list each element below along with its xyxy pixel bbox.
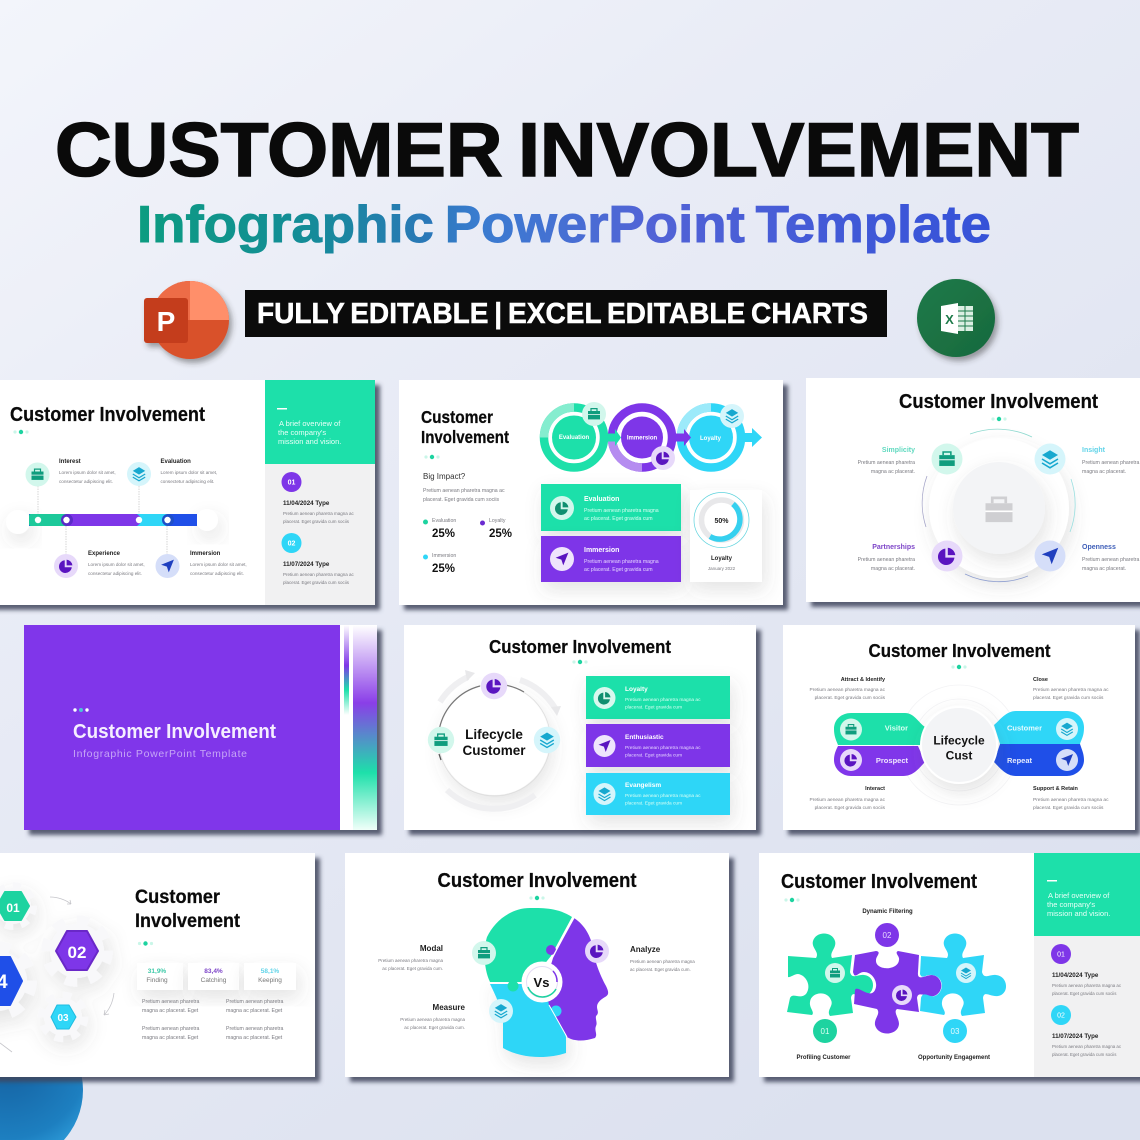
heading: customer: Customer <box>421 407 493 427</box>
labels: Openness <box>1082 544 1116 551</box>
timeline labels: Lorem ipsum dolor sit amet, <box>160 470 217 475</box>
paragraphs: magna ac placerat. Eget <box>142 1035 199 1041</box>
labels: Modal <box>420 944 443 953</box>
timeline bar <box>6 486 218 554</box>
card: evaluation: Pretium aenean pharetra magna <box>584 508 659 514</box>
big impact block <box>423 472 512 575</box>
circle flow <box>544 402 762 470</box>
side panel text: Pretium aenean pharetra magna ac <box>1052 983 1122 988</box>
center circle: Lifecycle <box>933 734 985 748</box>
text labels: Support & Retain <box>1033 786 1079 792</box>
stat cards <box>137 963 296 990</box>
card: immersion: Immersion <box>584 547 619 554</box>
gears <box>0 885 108 1039</box>
numbered badges: 02 <box>883 931 892 940</box>
timeline labels: Lorem ipsum dolor sit amet, <box>88 562 145 567</box>
paragraphs: Pretium aenean pharetra <box>226 1026 284 1032</box>
text labels: placerat. Eget gravida cum sociis <box>1033 805 1104 811</box>
lifecycle ring: Lifecycle <box>465 727 523 742</box>
side panel text: 11/04/2024 Type <box>1052 972 1099 979</box>
timeline labels: consectetur adipiscing elit. <box>59 479 113 484</box>
heading: Customer Involvement <box>73 721 276 743</box>
card: enthusiastic: Pretium aenean pharetra magna ac <box>625 745 701 751</box>
donut chart card: Loyalty <box>711 556 733 562</box>
numbered badges <box>796 923 990 1061</box>
heading: Customer Involvement <box>10 404 205 426</box>
labels: Measure <box>433 1003 466 1012</box>
side panel text: 01 <box>1057 952 1065 958</box>
timeline labels <box>59 459 247 576</box>
panel: slide 4 purple cover <box>24 625 377 830</box>
stat cards: Keeping <box>258 977 282 984</box>
central circle <box>929 438 1069 578</box>
big impact block: 25% <box>489 528 512 540</box>
labels: ac placerat. Eget gravida cum. <box>630 967 691 972</box>
pills <box>834 711 1084 776</box>
head silhouette <box>485 908 608 1057</box>
heading: involvement: Involvement <box>135 910 240 932</box>
side panel text: placerat. Eget gravida cum sociis <box>283 519 350 524</box>
hexagon 01: 01 <box>6 901 20 915</box>
card: enthusiastic <box>586 724 730 767</box>
panel: slide 1 timeline <box>0 380 375 605</box>
paragraphs: magna ac placerat. Eget <box>142 1008 199 1014</box>
numbered badges: 03 <box>951 1027 960 1036</box>
hexagon 01 <box>0 892 29 920</box>
labels: ac placerat. Eget gravida cum. <box>404 1025 465 1030</box>
card: loyalty: Pretium aenean pharetra magna ac <box>625 697 701 703</box>
paragraphs: magna ac placerat. Eget <box>226 1008 283 1014</box>
circle flow: Evaluation <box>559 435 590 441</box>
center circle <box>921 707 997 783</box>
labels: Insight <box>1082 447 1106 454</box>
piece: green <box>787 934 873 1016</box>
labels: Pretium aenean pharetra <box>1082 460 1140 466</box>
puzzle <box>787 934 1006 1034</box>
side panel text: the company's <box>1047 900 1095 909</box>
orbit arcs <box>922 429 1075 582</box>
side panel text: placerat. Eget gravida cum sociis <box>283 580 350 585</box>
subtitle: Infographic PowerPoint Template <box>137 196 991 254</box>
big impact block: Evaluation <box>432 518 456 524</box>
side panel text: placerat. Eget gravida cum sociis <box>1052 1052 1117 1057</box>
side panel text: 01 <box>288 480 295 486</box>
piece: cyan <box>920 934 1006 1016</box>
banner: FULLY EDITABLE | EXCEL EDITABLE CHARTS <box>257 298 868 330</box>
paragraphs: Pretium aenean pharetra <box>226 999 284 1005</box>
heading: customer: Customer <box>135 886 220 908</box>
big impact block: Loyalty <box>489 518 506 524</box>
pills: Customer <box>1007 724 1042 732</box>
timeline labels: consectetur adipiscing elit. <box>88 571 142 576</box>
side panel text: placerat. Eget gravida cum sociis <box>1052 991 1117 996</box>
labels: magna ac placerat. <box>871 469 915 475</box>
heading: Customer Involvement <box>489 636 671 657</box>
labels <box>378 944 695 1030</box>
card: evangelism: Evangelism <box>625 782 661 789</box>
timeline labels: Immersion <box>190 551 221 557</box>
paragraphs: Pretium aenean pharetra <box>142 1026 200 1032</box>
paragraphs <box>142 999 284 1041</box>
icon: PowerPoint logo: P <box>157 306 175 337</box>
side panel text: 11/07/2024 Type <box>1052 1033 1099 1040</box>
lifecycle ring <box>428 670 561 809</box>
text labels: placerat. Eget gravida cum sociis <box>1033 695 1104 701</box>
side panel text: Pretium aenean pharetra magna ac <box>283 572 355 577</box>
big impact block: 25% <box>432 528 455 540</box>
text labels: Interact <box>865 786 885 792</box>
labels: Simplicity <box>882 447 915 454</box>
text labels <box>810 677 1109 811</box>
panel: slide 2 circles and cards <box>399 380 783 605</box>
donut chart card <box>690 490 762 582</box>
paragraphs: magna ac placerat. Eget <box>226 1035 283 1041</box>
text labels: placerat. Eget gravida cum sociis <box>815 695 886 701</box>
card: evaluation <box>541 484 681 531</box>
panel: slide 5 lifecycle <box>404 625 756 830</box>
pills: Prospect <box>876 756 908 765</box>
heading: Customer Involvement <box>899 391 1098 413</box>
panel: slide 9 puzzle: Dynamic Filtering <box>862 909 913 915</box>
timeline labels: consectetur adipiscing elit. <box>190 571 244 576</box>
labels: ac placerat. Eget gravida cum. <box>382 966 443 971</box>
card: evaluation: ac placerat. Eget gravida cum <box>584 516 653 522</box>
stat cards: 58,1% <box>261 968 279 975</box>
labels: magna ac placerat. <box>1082 469 1126 475</box>
timeline labels: Evaluation <box>160 459 191 465</box>
big impact block: Immersion <box>432 553 456 559</box>
piece: purple <box>853 951 941 1034</box>
panel: slide 9 puzzle <box>759 853 1140 1077</box>
side panel text <box>1047 880 1122 1057</box>
heading: Customer Involvement <box>781 871 977 893</box>
numbered badges: 01 <box>821 1027 830 1036</box>
stat cards: Catching <box>201 977 227 984</box>
timeline labels: Interest <box>59 459 81 465</box>
labels <box>858 447 1140 572</box>
labels: magna ac placerat. <box>1082 566 1126 572</box>
timeline labels: Lorem ipsum dolor sit amet, <box>190 562 247 567</box>
labels: Pretium aenean pharetra <box>858 460 915 466</box>
side panel text: 11/07/2024 Type <box>283 561 330 568</box>
pills: Visitor <box>885 724 908 732</box>
heading: Customer Involvement <box>438 870 637 892</box>
card: evangelism: placerat. Eget gravida cum <box>625 800 682 806</box>
timeline labels: Lorem ipsum dolor sit amet, <box>59 470 116 475</box>
stat cards: 31,9% <box>148 968 166 975</box>
card: immersion <box>541 536 681 582</box>
text labels: Pretium aenean pharetra magna ac <box>1033 797 1109 803</box>
panel: slide 8 head puzzle <box>345 853 729 1077</box>
text labels: Pretium aenean pharetra magna ac <box>810 797 886 803</box>
rings <box>899 685 1019 805</box>
side panel text: 11/04/2024 Type <box>283 500 330 507</box>
text labels: placerat. Eget gravida cum sociis <box>815 805 886 811</box>
icon: Excel logo <box>917 279 995 357</box>
labels: Pretium aenean pharetra <box>858 557 915 563</box>
side panel text: mission and vision. <box>1047 909 1110 918</box>
card: evangelism: Pretium aenean pharetra magna ac <box>625 793 701 799</box>
heading: involvement: Involvement <box>421 427 509 447</box>
side panel text: 02 <box>1057 1012 1065 1020</box>
labels: Pretium aenean pharetra <box>1082 557 1140 563</box>
side panel text: Pretium aenean pharetra magna ac <box>283 511 355 516</box>
card: evaluation: Evaluation <box>584 496 619 503</box>
side panel text: the company's <box>278 428 326 437</box>
card: loyalty: Loyalty <box>625 686 648 693</box>
icon: PowerPoint logo <box>144 281 229 359</box>
donut chart card: January 2022 <box>708 566 736 571</box>
big impact block: placerat. Eget gravida cum sociis <box>423 497 500 503</box>
labels: Partnerships <box>872 544 915 551</box>
hexagon 03 <box>51 1005 76 1029</box>
heading: Customer Involvement <box>868 640 1050 661</box>
labels: Pretium aenean pharetra magna <box>400 1017 465 1022</box>
side panel text <box>277 408 355 585</box>
card: immersion: ac placerat. Eget gravida cum <box>584 567 653 573</box>
banner <box>245 290 887 337</box>
lifecycle ring: Customer <box>462 743 526 758</box>
pills: Repeat <box>1007 756 1033 765</box>
panel: slide 7 gears and hexagons <box>0 853 315 1077</box>
card: loyalty: placerat. Eget gravida cum <box>625 704 682 710</box>
big impact block: 25% <box>432 563 455 575</box>
panel: slide 4 purple cover: Infographic PowerPoint Template <box>73 748 247 760</box>
side panel text: A brief overview of <box>1048 891 1110 900</box>
title: CUSTOMER INVOLVEMENT <box>55 108 1079 193</box>
Vs badge: Vs <box>534 975 549 990</box>
decorative blob <box>0 1015 83 1140</box>
card: evangelism <box>586 773 730 815</box>
timeline labels: Experience <box>88 551 121 557</box>
side panel text: mission and vision. <box>278 437 341 446</box>
card: enthusiastic: Enthusiastic <box>625 734 664 741</box>
labels: Analyze <box>630 945 661 954</box>
numbered badges: Profiling Customer <box>796 1055 851 1061</box>
card: loyalty <box>586 676 730 719</box>
text labels: Pretium aenean pharetra magna ac <box>810 687 886 693</box>
side panel text: A brief overview of <box>279 419 341 428</box>
arrows <box>0 897 114 1052</box>
text labels: Pretium aenean pharetra magna ac <box>1033 687 1109 693</box>
big impact block: Pretium aenean pharetra magna ac <box>423 488 505 494</box>
circle flow: Loyalty <box>700 436 722 442</box>
big impact block: Big Impact? <box>423 472 466 481</box>
text labels: Close <box>1033 677 1048 683</box>
hexagon 03: 03 <box>57 1013 69 1024</box>
card: immersion: Pretium aenean pharetra magna <box>584 559 659 565</box>
side panel text: Pretium aenean pharetra magna ac <box>1052 1044 1122 1049</box>
panel: slide 3 circular diagram <box>806 378 1140 602</box>
hexagon 04 <box>0 957 22 1005</box>
donut chart card: 50% <box>714 518 729 525</box>
center circle: Cust <box>946 748 972 762</box>
icon: Excel logo: X <box>945 312 954 327</box>
paragraphs: Pretium aenean pharetra <box>142 999 200 1005</box>
numbered badges: Opportunity Engagement <box>918 1055 990 1061</box>
hexagon 02: 02 <box>68 943 86 962</box>
side panel text: 02 <box>288 540 295 548</box>
timeline labels: consectetur adipiscing elit. <box>160 479 214 484</box>
labels: Pretium aenean pharetra magna <box>378 958 443 963</box>
card: enthusiastic: placerat. Eget gravida cum <box>625 752 682 758</box>
icons <box>26 462 180 578</box>
hexagon 02 <box>56 931 98 970</box>
labels: Pretium aenean pharetra magna <box>630 959 695 964</box>
circle flow: Immersion <box>627 436 658 442</box>
stat cards: Finding <box>146 977 168 984</box>
labels: magna ac placerat. <box>871 566 915 572</box>
panel: slide 6 lifecycle pills <box>783 625 1135 830</box>
stat cards: 83,4% <box>204 968 223 975</box>
Vs badge <box>522 962 562 1002</box>
text labels: Attract & Identify <box>841 677 886 683</box>
